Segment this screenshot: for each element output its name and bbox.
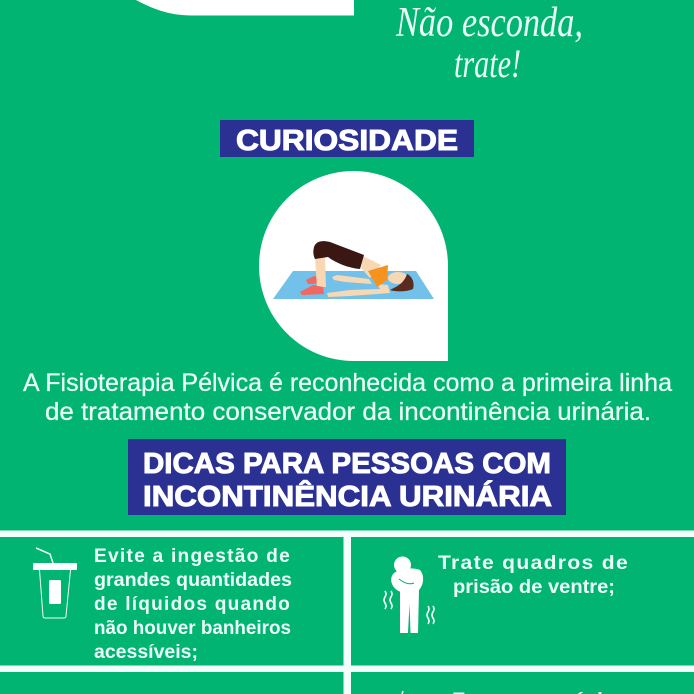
drop panel with exercise illustration xyxy=(259,171,448,361)
tip text xyxy=(438,553,629,598)
icon: cup with straw xyxy=(33,548,77,618)
slogan xyxy=(395,0,583,86)
tip text xyxy=(94,546,292,663)
tips grid lines xyxy=(0,530,694,694)
description text: A Fisioterapia Pélvica é reconhecida como a primeira linha xyxy=(23,369,672,397)
heading: dicas: INCONTINÊNCIA URINÁRIA xyxy=(143,479,552,513)
tip text: acessíveis; xyxy=(94,642,198,663)
description text: de tratamento conservador da incontinência urinária. xyxy=(45,398,651,426)
heading: dicas: DICAS PARA PESSOAS COM xyxy=(143,448,551,480)
heading: curiosidade: CURIOSIDADE xyxy=(236,125,458,157)
tip text: prisão de ventre; xyxy=(453,577,615,598)
tip text: de líquidos quando xyxy=(94,594,291,615)
heading: dicas xyxy=(128,439,566,515)
illustration: woman doing pelvic bridge xyxy=(273,241,434,299)
tip: liquids xyxy=(33,546,292,663)
icon: person with stomach ache xyxy=(384,556,434,633)
description text xyxy=(23,369,672,426)
tip text: grandes quantidades xyxy=(94,570,292,591)
tip text: não houver banheiros xyxy=(94,618,291,639)
slogan: Não esconda, xyxy=(395,0,583,46)
top white shape xyxy=(136,0,354,16)
tip text: Evite a ingestão de xyxy=(94,546,291,567)
tip text: Trate quadros de xyxy=(438,553,629,574)
tip: constipation xyxy=(384,553,629,633)
heading: curiosidade xyxy=(220,120,474,157)
slogan: trate! xyxy=(454,41,521,86)
